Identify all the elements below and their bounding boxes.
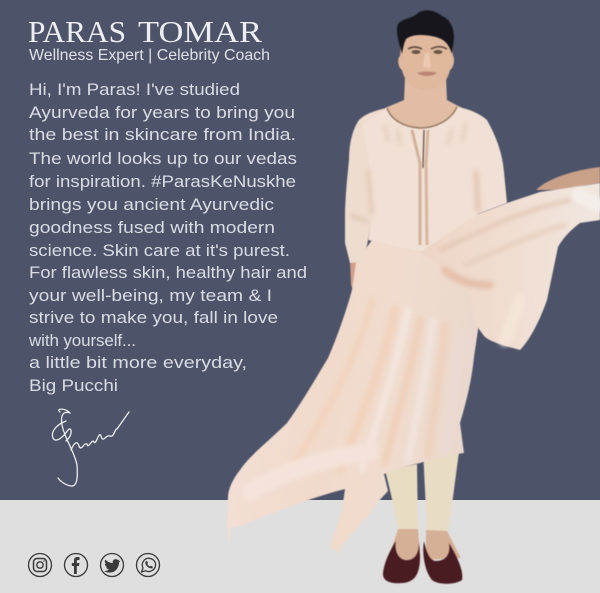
button placket <box>387 107 457 245</box>
icon: whatsapp <box>136 554 160 576</box>
feet <box>388 529 461 560</box>
drape fold shading <box>440 195 598 340</box>
biography text block: your well-being, my team & I <box>29 286 272 305</box>
icon: instagram <box>28 554 52 576</box>
biography text block: a little bit more everyday, <box>29 353 247 372</box>
figure: man in peach kurta <box>227 10 600 584</box>
biography text block: For flawless skin, healthy hair and <box>29 263 307 282</box>
torso shading: sleeve fold and yoke pleats <box>350 122 478 222</box>
skirt fold shading <box>250 300 460 492</box>
icon: twitter <box>100 554 124 576</box>
biography text block: brings you ancient Ayurvedic <box>29 195 275 214</box>
title: TOMAR <box>138 14 262 49</box>
title: PARAS <box>28 14 126 49</box>
head <box>398 28 454 90</box>
biography text block: goodness fused with modern <box>29 218 275 237</box>
kurta torso <box>362 107 507 252</box>
left shoe <box>383 541 420 583</box>
right hand holding cloth <box>536 167 600 190</box>
biography text block: science. Skin care at it's purest. <box>29 241 290 260</box>
biography text block <box>28 80 307 395</box>
left sleeve <box>345 108 387 263</box>
biography text block: for inspiration. #ParasKeNuskhe <box>29 172 296 191</box>
signature <box>52 409 129 486</box>
biography text block: with yourself... <box>28 331 136 350</box>
biography text block: Big Pucchi <box>29 376 118 395</box>
floor band <box>0 500 600 593</box>
biography text block: strive to make you, fall in love <box>29 308 278 327</box>
biography text block: the best in skincare from India. <box>29 125 296 144</box>
subtitle: Wellness Expert | Celebrity Coach <box>29 47 270 64</box>
face features <box>408 47 447 76</box>
left hand <box>350 260 364 296</box>
hair <box>397 10 454 54</box>
trouser legs <box>385 464 418 531</box>
swooping cloth drape <box>385 183 600 350</box>
kurta skirt <box>227 240 490 553</box>
right shoe <box>423 541 462 584</box>
neck <box>385 78 462 131</box>
biography text block: The world looks up to our vedas <box>29 149 297 168</box>
biography text block: Ayurveda for years to bring you <box>29 103 295 122</box>
biography text block: Hi, I'm Paras! I've studied <box>29 80 240 99</box>
icon: facebook <box>64 554 88 576</box>
